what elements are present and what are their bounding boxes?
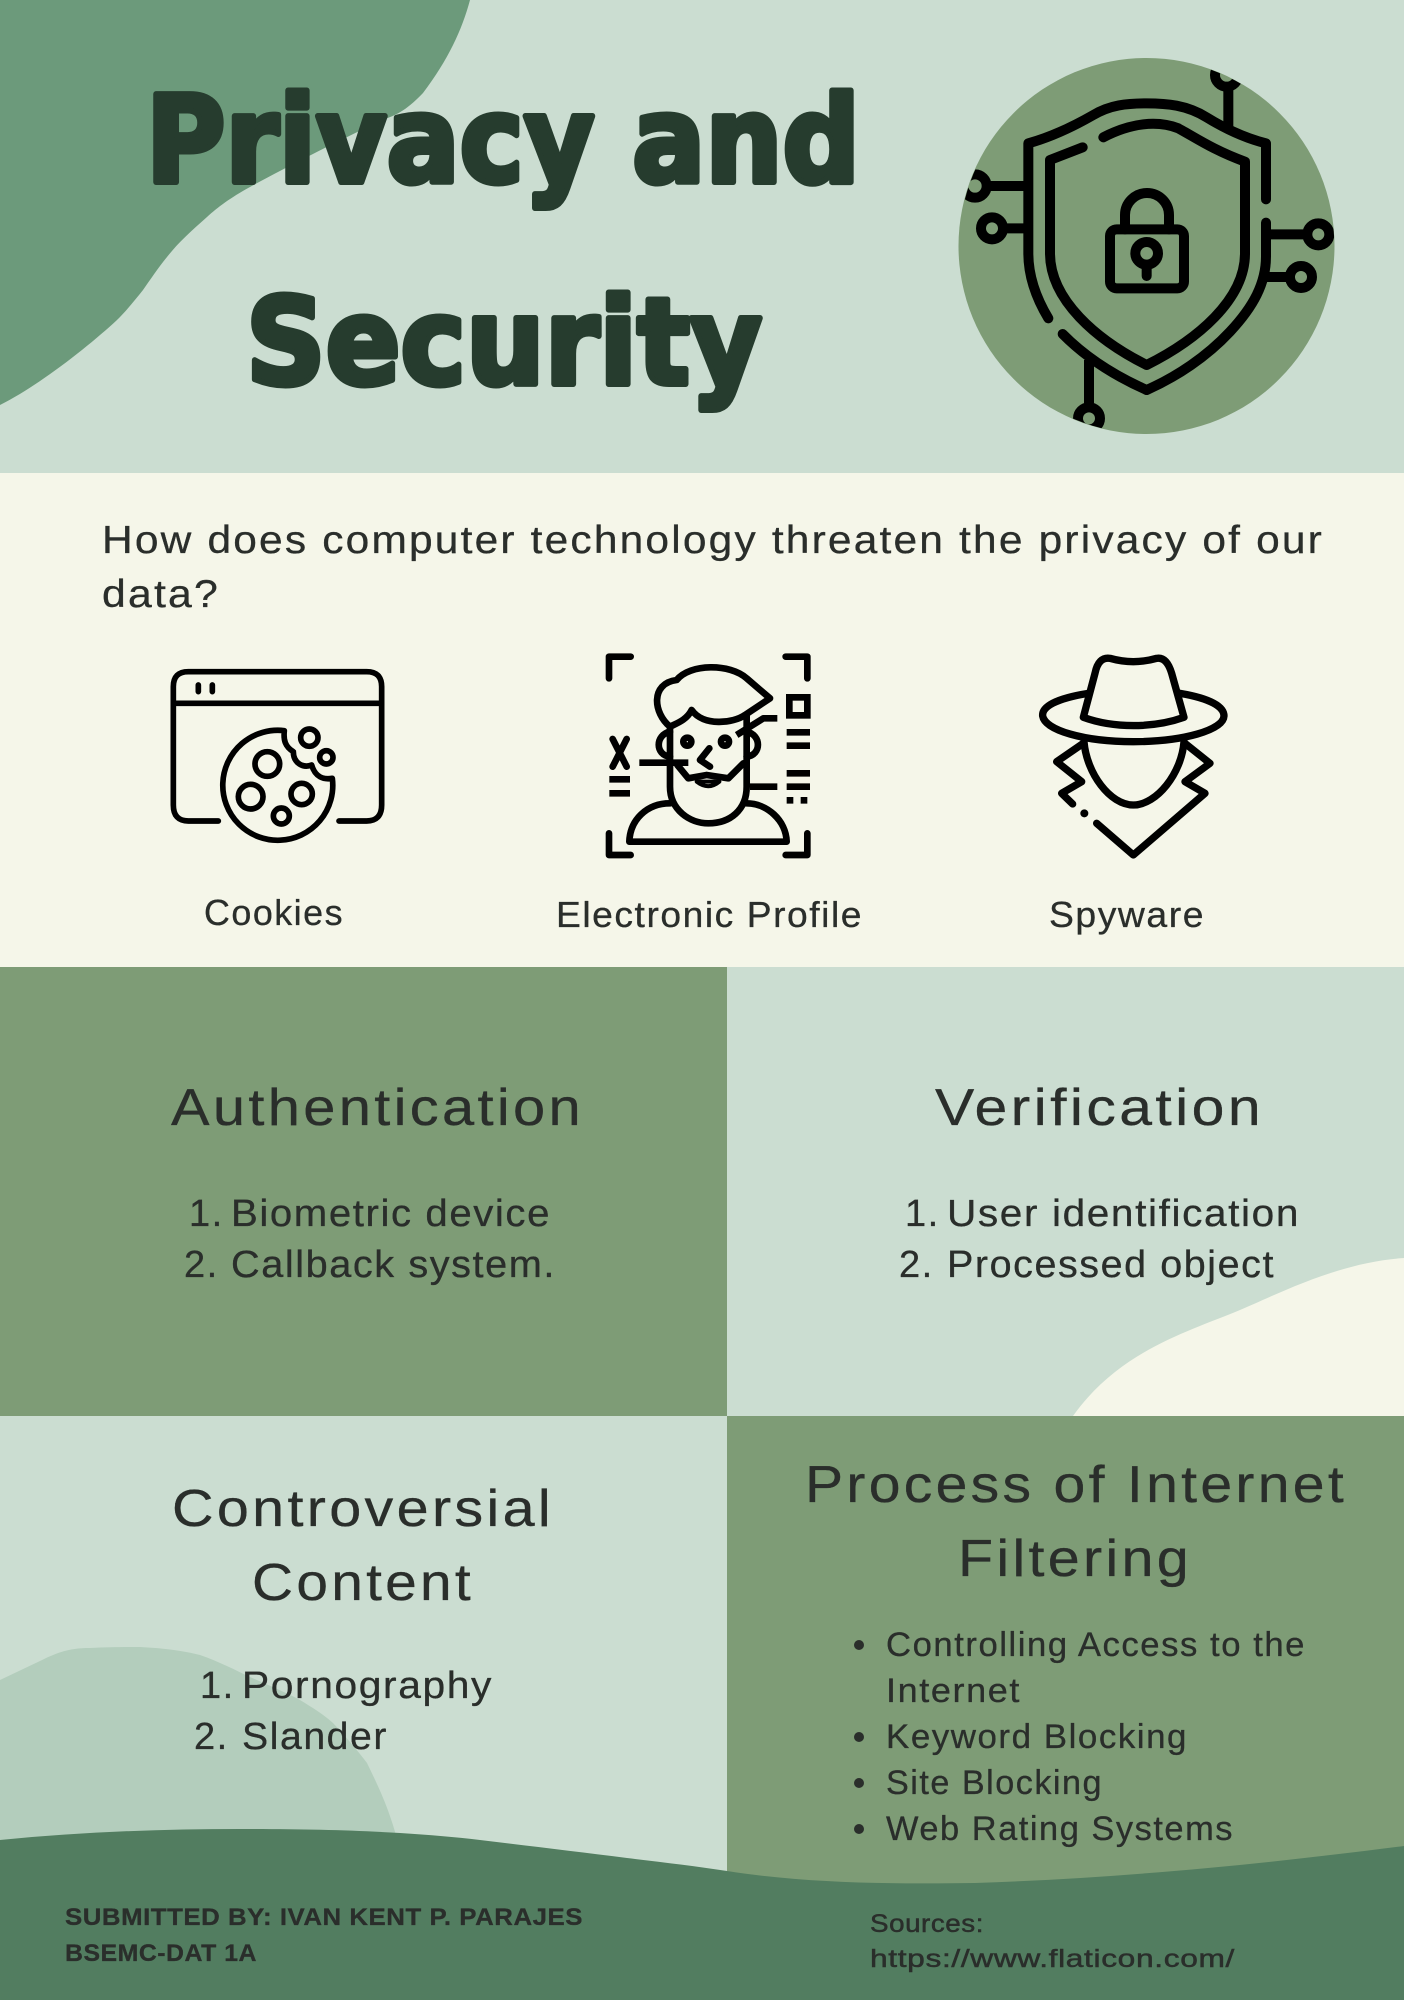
list: internet filtering (854, 1626, 1306, 1848)
title: Security (246, 274, 762, 413)
list: controversial content (194, 1665, 493, 1758)
list: verification: 1. (905, 1193, 940, 1235)
list: authentication: 2. (184, 1244, 219, 1286)
question text (102, 519, 1324, 616)
list: verification: Processed object (947, 1244, 1275, 1286)
icon: cookies (173, 672, 382, 840)
label: spyware: Spyware (1049, 894, 1205, 935)
list: controversial content: Pornography (242, 1665, 493, 1707)
heading: authentication: Authentication (171, 1079, 584, 1137)
heading: controversial content: Content (252, 1554, 474, 1612)
icon: electronic profile (609, 657, 810, 855)
panel: threats to privacy (0, 473, 1404, 967)
sources text (870, 1910, 1235, 1973)
sources text: Sources: (870, 1910, 984, 1938)
list: authentication: Callback system. (231, 1244, 556, 1286)
list: internet filtering: Web Rating Systems (886, 1810, 1234, 1848)
label: cookies: Cookies (204, 892, 344, 933)
icon: spyware (1043, 658, 1224, 855)
panel: authentication (0, 967, 727, 1416)
list: authentication: Biometric device (231, 1193, 551, 1235)
heading: controversial content (172, 1480, 554, 1612)
panel: verification (727, 967, 1404, 1416)
list: controversial content: 1. (200, 1665, 235, 1707)
heading: controversial content: Controversial (172, 1480, 554, 1538)
label: electronic profile: Electronic Profile (556, 894, 863, 935)
panel: header (0, 0, 1334, 434)
question text: How does computer technology threaten the privacy of our (102, 519, 1324, 562)
panel: process of internet filtering (727, 1416, 1404, 1896)
list: internet filtering: Keyword Blocking (886, 1718, 1188, 1756)
credit text (65, 1904, 583, 1967)
list: authentication: 1. (189, 1193, 224, 1235)
title: Privacy and (146, 72, 860, 211)
heading: internet filtering: Process of Internet (805, 1456, 1347, 1514)
panel: footer (0, 1829, 1404, 2000)
panel: controversial content (0, 1416, 727, 1886)
credit text: SUBMITTED BY: IVAN KENT P. PARAJES (65, 1904, 583, 1931)
list: controversial content: 2. (194, 1716, 229, 1758)
list: controversial content: Slander (242, 1716, 388, 1758)
list: internet filtering: Internet (886, 1672, 1021, 1710)
heading: internet filtering: Filtering (958, 1530, 1192, 1588)
title (146, 72, 860, 413)
list: verification (899, 1193, 1300, 1286)
sources text: https://www.flaticon.com/ (870, 1945, 1235, 1973)
list: verification: 2. (899, 1244, 934, 1286)
icon: shield with padlock in circle (958, 58, 1334, 434)
heading: internet filtering (805, 1456, 1347, 1588)
credit text: BSEMC-DAT 1A (65, 1940, 257, 1967)
question text: data? (102, 573, 220, 616)
heading: verification: Verification (935, 1079, 1264, 1137)
list: internet filtering: Site Blocking (886, 1764, 1103, 1802)
list: verification: User identification (947, 1193, 1300, 1235)
list: internet filtering: Controlling Access to the (886, 1626, 1306, 1664)
list: authentication (184, 1193, 556, 1286)
decorative blob: top left (0, 0, 470, 405)
